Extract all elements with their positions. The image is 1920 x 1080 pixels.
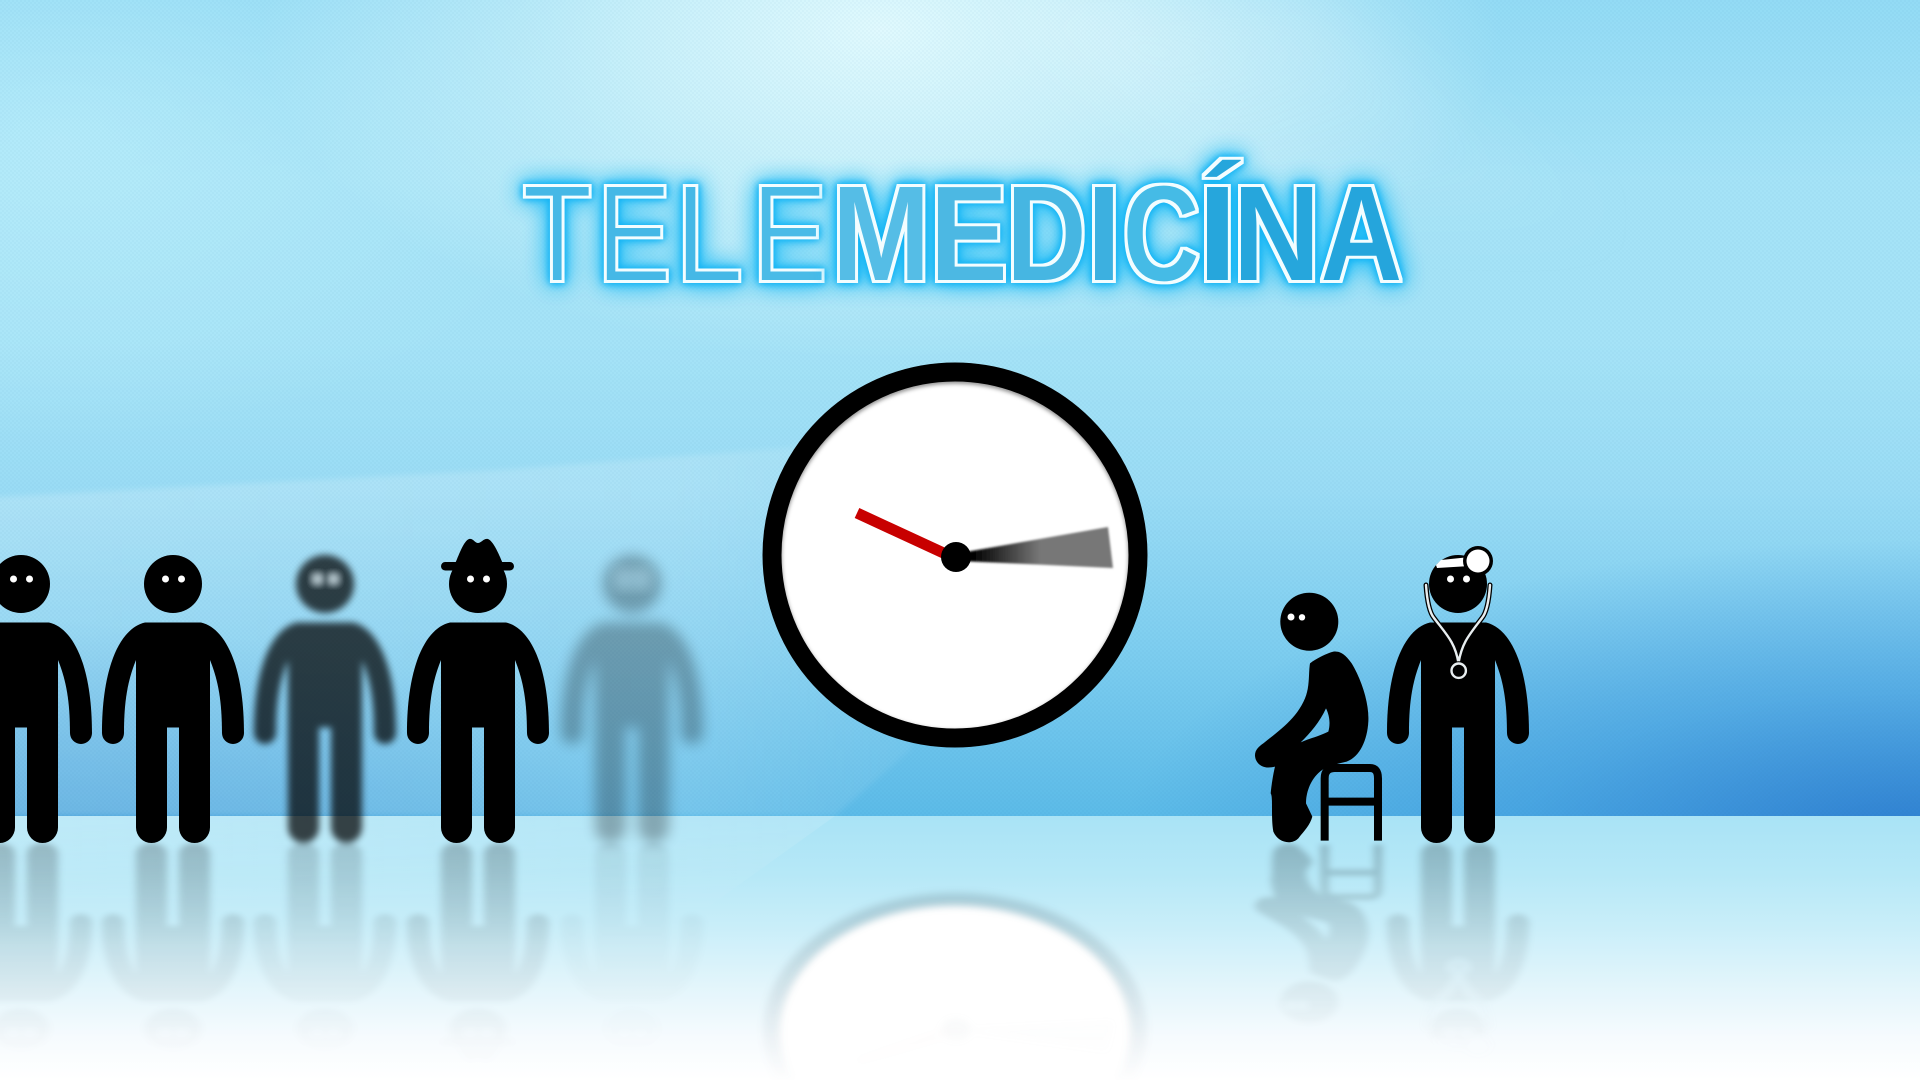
- doctor with head mirror and stethoscope: [1387, 546, 1529, 843]
- seated patient on stool: [1255, 593, 1378, 842]
- title: M: [832, 157, 930, 311]
- title: T: [522, 156, 592, 310]
- scene illustration: [0, 362, 1530, 1044]
- minute hand motion blur: [960, 527, 1113, 568]
- title: I: [1087, 156, 1121, 310]
- title: E: [752, 156, 827, 310]
- person 3 blurred, fading: [254, 555, 396, 843]
- person 1 cropped at left edge: [0, 555, 92, 843]
- title: E: [930, 158, 1008, 311]
- clock inner shadow: [779, 381, 1131, 733]
- title: [504, 136, 1420, 311]
- person 5 strongly blurred, faint: [561, 555, 703, 843]
- background wall: [0, 0, 1920, 816]
- person 4 with hat: [407, 539, 549, 843]
- background light shapes and texture: [0, 0, 1389, 870]
- reflection of clock: [765, 890, 1145, 1044]
- title: A: [1320, 156, 1403, 310]
- clock: [772, 372, 1138, 738]
- clock face: [772, 372, 1138, 738]
- floor: [0, 816, 1920, 1080]
- title: L: [675, 156, 743, 311]
- reflections of people: [0, 842, 1530, 1008]
- title: Í: [1197, 156, 1241, 310]
- title: E: [597, 156, 672, 311]
- title: D: [1007, 157, 1086, 311]
- clock rim: [772, 372, 1138, 738]
- person 2: [102, 555, 244, 843]
- title: C: [1123, 158, 1200, 311]
- clock hub: [941, 542, 971, 572]
- red hour hand: [857, 513, 950, 556]
- title: N: [1233, 157, 1320, 311]
